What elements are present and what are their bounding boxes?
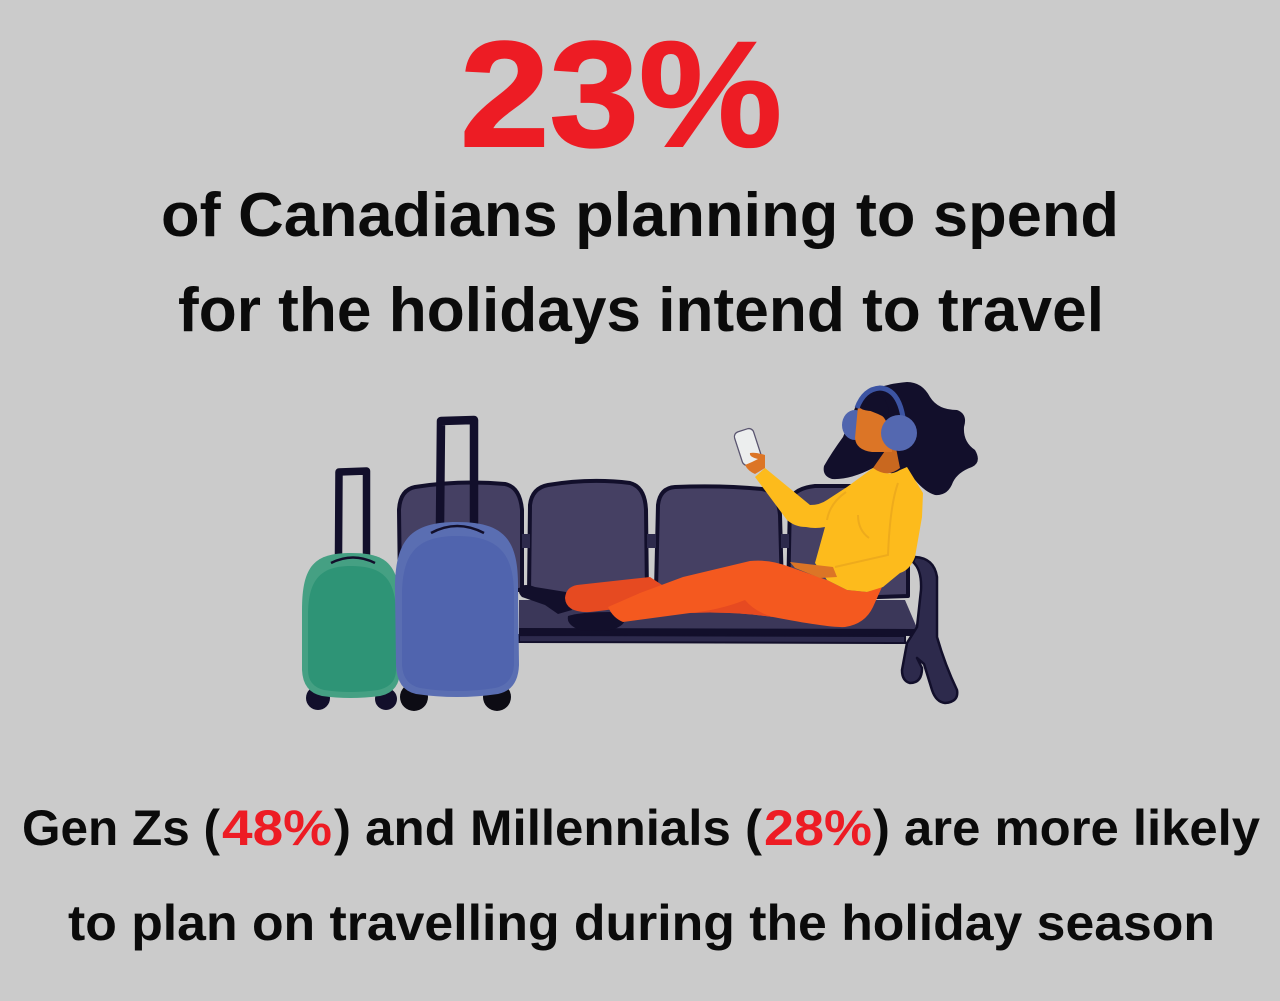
supporting statement: 28% — [764, 800, 872, 856]
sweater fold lines — [827, 483, 898, 567]
illustration: woman waiting on airport bench with luggage — [302, 382, 978, 711]
big statistic: 23%: 23% — [460, 10, 782, 178]
phone — [733, 427, 763, 467]
supporting statement: to plan on travelling during the holiday season — [68, 895, 1215, 951]
bench leg — [902, 557, 957, 703]
hand holding phone — [745, 453, 765, 474]
front hair — [860, 395, 888, 423]
heading — [161, 181, 1119, 345]
supporting statement: ) and Millennials ( — [334, 800, 762, 856]
green suitcase — [302, 471, 400, 710]
neck — [873, 448, 900, 474]
shoes — [519, 585, 625, 631]
bench seats — [399, 481, 908, 600]
knee shadow — [690, 600, 773, 617]
headphone ear cup far — [842, 410, 868, 440]
sweater — [755, 467, 923, 592]
back leg — [565, 577, 700, 612]
supporting statement: 48% — [222, 800, 332, 856]
heading: of Canadians planning to spend — [161, 181, 1119, 250]
supporting statement: Gen Zs ( — [22, 800, 220, 856]
supporting statement: ) are more likely — [873, 800, 1260, 856]
headphone ear cup near — [881, 415, 917, 451]
heading: for the holidays intend to travel — [178, 276, 1104, 345]
bench connectors — [522, 534, 789, 548]
hair — [824, 382, 978, 495]
bench seat pan — [519, 600, 917, 643]
front leg trousers — [608, 561, 882, 627]
headphone band — [857, 388, 903, 417]
face — [855, 406, 892, 452]
blue suitcase — [395, 420, 519, 711]
supporting statement — [22, 800, 1260, 951]
hand on lap — [790, 562, 837, 578]
